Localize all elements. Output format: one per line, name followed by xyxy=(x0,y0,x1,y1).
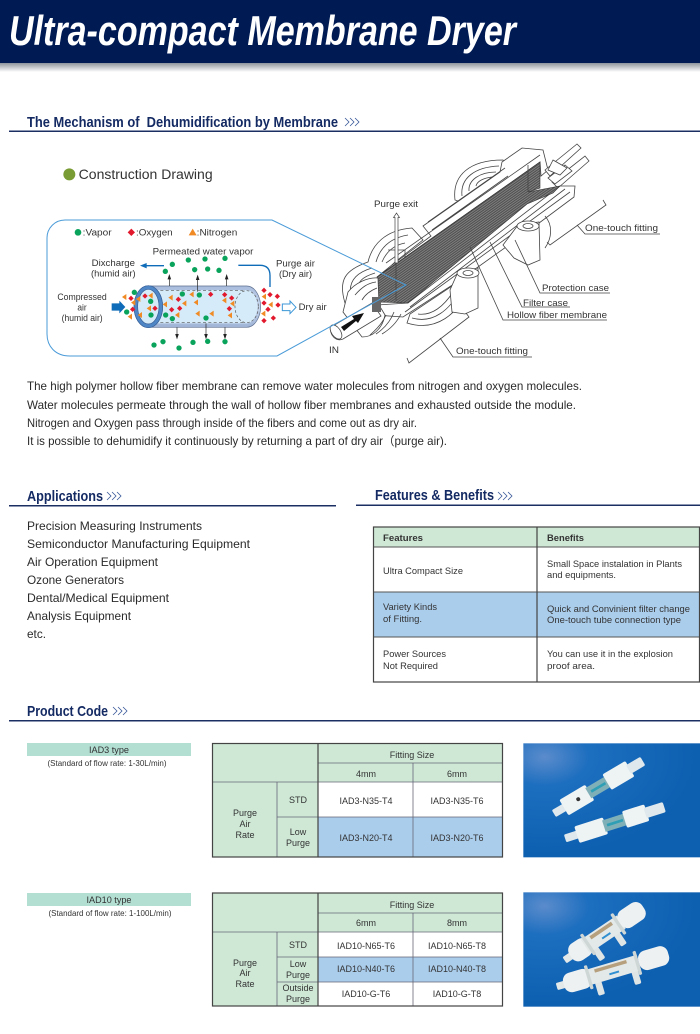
callout: membrane mechanism xyxy=(57,227,327,351)
section heading: product code: Product Code xyxy=(27,703,108,720)
flow labels: Permeated water vapor xyxy=(153,246,253,256)
header banner xyxy=(0,0,700,72)
applications list: Air Operation Equipment xyxy=(27,555,159,569)
applications list: Semiconductor Manufacturing Equipment xyxy=(27,537,251,551)
IAD3 product code table: 6mm xyxy=(447,769,467,779)
labels: One-touch fitting xyxy=(585,223,658,234)
features and benefits table: and equipments. xyxy=(547,570,616,581)
IAD3 product code table: Purge xyxy=(286,838,310,848)
labels xyxy=(329,199,658,357)
flow labels: Dry air xyxy=(299,302,327,312)
flow labels xyxy=(57,246,327,323)
flow labels: (Dry air) xyxy=(279,269,312,279)
hollow fiber bundle xyxy=(377,162,560,303)
IAD10 product code table: IAD10-N65-T8 xyxy=(428,941,486,951)
labels: One-touch fitting xyxy=(456,346,528,357)
IAD10 product photo xyxy=(523,892,700,1007)
IAD10 product code table: 6mm xyxy=(356,918,376,928)
IAD10 product code table: STD xyxy=(289,940,308,950)
left fittings xyxy=(343,278,385,337)
IAD3 product code table: Fitting Size xyxy=(390,750,434,760)
features and benefits table: Power Sources xyxy=(383,649,446,660)
features and benefits table xyxy=(374,527,700,682)
features and benefits table: Variety Kinds xyxy=(383,602,437,613)
features and benefits table: Not Required xyxy=(383,661,438,672)
IAD3 type label: IAD3 type xyxy=(89,745,129,755)
IAD3 product code table: IAD3-N35-T4 xyxy=(339,796,393,806)
oxygen molecules xyxy=(128,288,281,323)
mechanism description: Water molecules permeate through the wall of hollow fiber membranes and exhausted outside the module. xyxy=(27,398,576,412)
applications list xyxy=(27,519,251,641)
IAD10 product code table: Rate xyxy=(235,979,255,989)
flow labels: Compressed xyxy=(57,292,107,302)
IAD3 type label: (Standard of flow rate: 1-30L/min) xyxy=(48,759,167,768)
arrows xyxy=(112,263,296,338)
applications list: etc. xyxy=(27,627,46,641)
mechanism description: The high polymer hollow fiber membrane can remove water molecules from nitrogen and oxygen molecules. xyxy=(27,379,582,393)
features and benefits table: Features xyxy=(383,533,423,544)
IAD3 product code table: Air xyxy=(240,819,251,829)
nitrogen molecules xyxy=(122,291,273,320)
section heading: mechanism xyxy=(9,114,700,132)
features and benefits table: Quick and Convinient filter change xyxy=(547,604,690,615)
section heading: applications: Applications xyxy=(27,488,103,505)
lower case xyxy=(375,186,575,317)
IAD10 product code table: Outside xyxy=(282,983,314,993)
mechanism description xyxy=(27,379,582,448)
mechanism description: Nitrogen and Oxygen pass through inside of the fibers and come out as dry air. xyxy=(27,416,417,430)
IAD10 product code table: Air xyxy=(240,968,251,978)
upper housing xyxy=(377,148,548,277)
upper dryer xyxy=(558,897,655,977)
IAD10 product code table: IAD10-G-T8 xyxy=(433,989,481,999)
IAD3 product code table: IAD3-N20-T4 xyxy=(339,833,393,843)
IAD10 product code table: IAD10-N40-T8 xyxy=(428,964,486,974)
IAD10 product code table: 8mm xyxy=(447,918,467,928)
flow labels: (humid air) xyxy=(62,313,103,323)
lower dryer xyxy=(562,799,667,847)
features and benefits table: Ultra Compact Size xyxy=(383,566,463,577)
flow labels: (humid air) xyxy=(91,268,136,278)
applications list: Analysis Equipment xyxy=(27,609,132,623)
section heading: mechanism: The Mechanism of Dehumidification by Membrane xyxy=(27,114,338,131)
construction drawing label: Construction Drawing xyxy=(79,167,213,182)
IAD3 type label xyxy=(27,743,191,768)
IAD10 product code table: Purge xyxy=(233,958,257,968)
section heading: applications xyxy=(9,488,336,506)
IAD10 type label xyxy=(27,893,191,918)
IAD10 product code table: IAD10-N65-T6 xyxy=(337,941,395,951)
cutaway drawing of dryer xyxy=(328,144,660,363)
leader lines xyxy=(407,200,660,363)
applications list: Dental/Medical Equipment xyxy=(27,591,170,605)
lower flange and feet xyxy=(407,284,468,325)
mechanism description: It is possible to dehumidify it continuously by returning a part of dry air（purge air). xyxy=(27,434,447,448)
IAD10 product code table: Purge xyxy=(286,994,310,1004)
IAD10 product code table: IAD10-G-T6 xyxy=(342,989,390,999)
flow labels: Dixcharge xyxy=(92,258,135,268)
IAD10 type label: (Standard of flow rate: 1-100L/min) xyxy=(48,909,172,918)
back flanges xyxy=(342,228,423,305)
flow labels: Purge air xyxy=(276,259,315,269)
IAD10 product code table: Fitting Size xyxy=(390,900,434,910)
magnified callout outline xyxy=(47,220,406,356)
IAD10 product code table: Low xyxy=(290,959,307,969)
vapor molecules xyxy=(124,256,228,351)
IAD10 product code table xyxy=(212,893,502,1006)
labels: Hollow fiber membrane xyxy=(507,310,607,321)
IAD10 product code table: Purge xyxy=(286,970,310,980)
inlet tube xyxy=(331,303,381,340)
section heading: features and benefits xyxy=(356,487,700,506)
title: Ultra-compact Membrane Dryer xyxy=(9,7,518,54)
IAD3 product code table: Rate xyxy=(235,830,255,840)
legend: :Nitrogen xyxy=(197,227,237,237)
IAD3 product code table: Purge xyxy=(233,808,257,818)
section heading: product code xyxy=(9,703,700,722)
IAD3 product code table xyxy=(212,743,502,857)
labels: Protection case xyxy=(542,283,609,294)
legend: :Oxygen xyxy=(136,227,173,237)
IAD3 product code table: IAD3-N20-T6 xyxy=(430,833,484,843)
labels: Filter case xyxy=(523,298,568,309)
flow labels: air xyxy=(77,302,87,312)
features and benefits table: You can use it in the explosion xyxy=(547,649,673,660)
IAD3 product code table: IAD3-N35-T6 xyxy=(430,796,484,806)
features and benefits table: Benefits xyxy=(547,533,584,544)
right end tubes xyxy=(545,144,581,176)
legend xyxy=(75,227,237,237)
features and benefits table: Small Space instalation in Plants xyxy=(547,559,682,570)
features and benefits table: One-touch tube connection type xyxy=(547,615,681,626)
arrow: purge exit xyxy=(394,213,400,263)
lower dryer xyxy=(553,942,674,1006)
features and benefits table: of Fitting. xyxy=(383,614,422,625)
arrow: inlet flow xyxy=(341,313,364,331)
IAD10 product code table: IAD10-N40-T6 xyxy=(337,964,395,974)
IAD3 product code table: STD xyxy=(289,795,308,805)
IAD3 product code table: 4mm xyxy=(356,769,376,779)
labels: IN xyxy=(329,345,339,356)
labels: Purge exit xyxy=(374,199,418,210)
section heading: features and benefits: Features & Benefits xyxy=(375,487,494,504)
IAD3 product photo xyxy=(523,743,700,857)
applications list: Precision Measuring Instruments xyxy=(27,519,202,533)
upper dryer xyxy=(549,753,647,821)
applications list: Ozone Generators xyxy=(27,573,124,587)
hollow fiber tube xyxy=(134,286,261,328)
features and benefits table: proof area. xyxy=(547,661,595,672)
legend: :Vapor xyxy=(83,227,112,237)
IAD10 type label: IAD10 type xyxy=(86,895,132,905)
IAD3 product code table: Low xyxy=(290,827,307,837)
